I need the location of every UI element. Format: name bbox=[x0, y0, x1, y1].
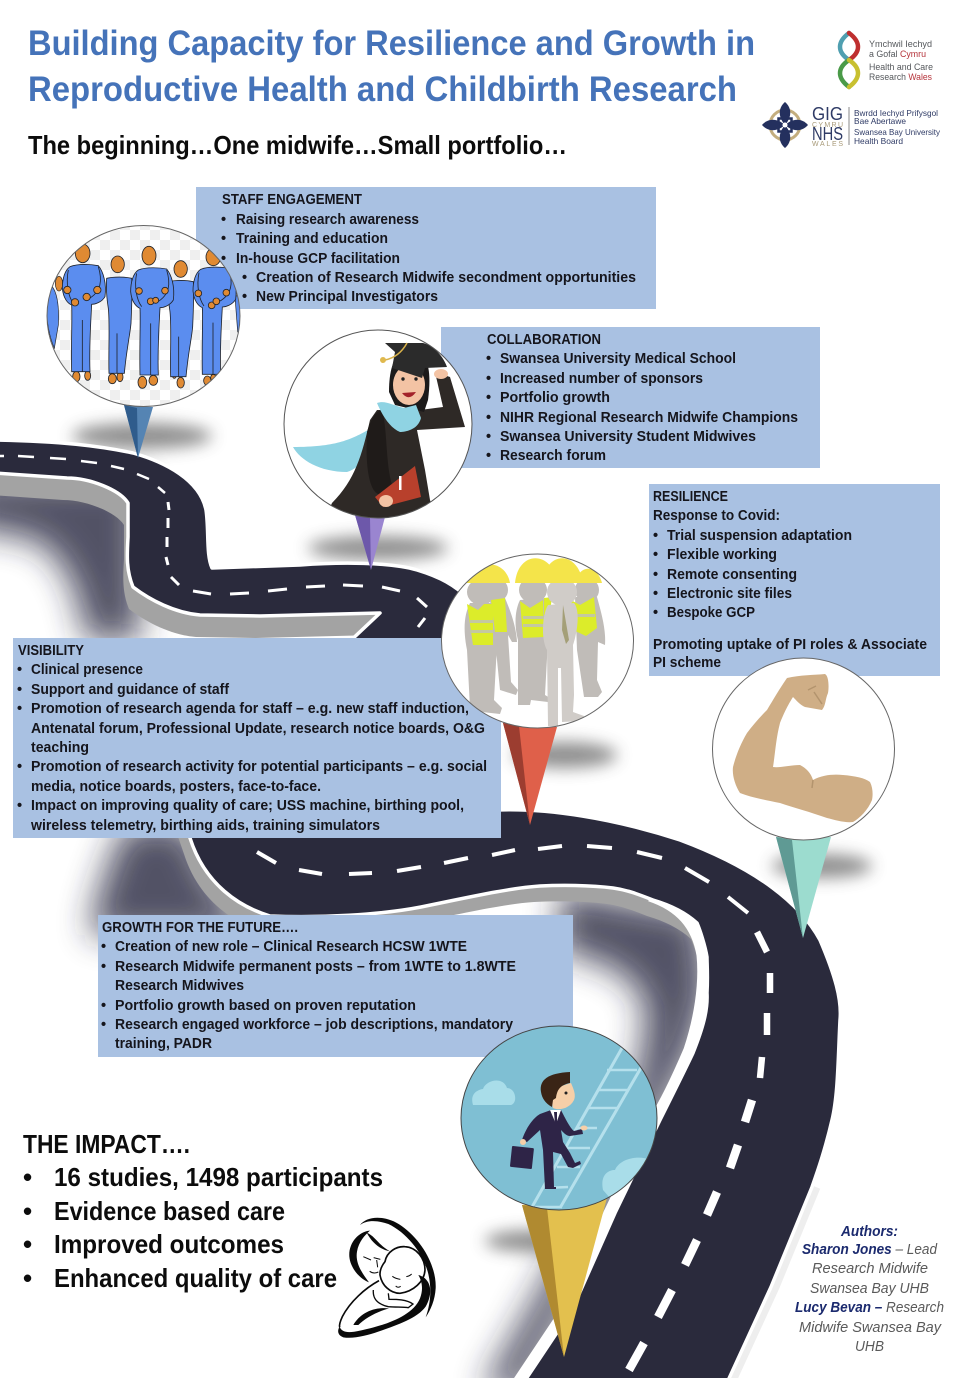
panel: visibility bbox=[13, 638, 501, 838]
hard hats bbox=[466, 558, 602, 583]
logo: NHS Wales Swansea Bay: GIG bbox=[812, 104, 843, 124]
panel: collaboration: • bbox=[486, 351, 491, 367]
panel: staff engagement: Training and education bbox=[236, 231, 388, 247]
panel: collaboration: • bbox=[486, 448, 491, 464]
panel: growth for the future: Research Midwives bbox=[115, 978, 244, 994]
panel: the impact: 16 studies, 1498 participants bbox=[54, 1162, 383, 1192]
authors credit: Midwife Swansea Bay bbox=[799, 1319, 942, 1336]
road: winding path with shadows, kerb and lane markings bbox=[0, 423, 872, 1378]
logo: NHS Wales Swansea Bay: NHS bbox=[812, 124, 843, 144]
inner kerb highlight bbox=[514, 896, 703, 1378]
panel: resilience: • bbox=[653, 528, 658, 544]
icon: helix bbox=[840, 33, 858, 87]
hands bbox=[520, 1139, 526, 1145]
icon: celtic knot bbox=[762, 102, 808, 148]
mother face bbox=[363, 1257, 380, 1273]
panel: collaboration: • bbox=[486, 390, 491, 406]
hair bbox=[389, 364, 430, 412]
heading: resilience: RESILIENCE bbox=[653, 489, 728, 505]
hand bbox=[434, 369, 448, 379]
panel: resilience: Remote consenting bbox=[667, 567, 797, 583]
panel: resilience: Flexible working bbox=[667, 547, 777, 563]
man suit bbox=[522, 1110, 583, 1189]
panel: resilience bbox=[649, 484, 940, 676]
panel: resilience: PI scheme bbox=[653, 655, 721, 671]
heading: staff engagement: STAFF ENGAGEMENT bbox=[222, 192, 362, 208]
authors credit: UHB bbox=[855, 1338, 884, 1355]
panel: collaboration: Swansea University Medical School bbox=[500, 351, 736, 367]
ladder bbox=[532, 1048, 642, 1208]
icon: graduate circle bbox=[284, 330, 472, 530]
heading: growth for the future: GROWTH FOR THE FUTURE…. bbox=[102, 920, 298, 936]
panel: collaboration bbox=[441, 327, 820, 468]
icon: staff group circle bbox=[47, 226, 242, 406]
authors credit: Authors: bbox=[840, 1223, 898, 1240]
baby head bbox=[380, 1247, 425, 1293]
logo: NHS Wales Swansea Bay: Bae Abertawe bbox=[854, 116, 906, 126]
panel: growth for the future: training, PADR bbox=[115, 1036, 213, 1052]
subtitle: The beginning…One midwife…Small portfolio… bbox=[28, 130, 567, 160]
panel: visibility: Clinical presence bbox=[31, 662, 143, 678]
scarf collar bbox=[377, 402, 421, 432]
panel: staff engagement: • bbox=[221, 212, 226, 228]
road kerb bbox=[0, 462, 834, 1378]
panel: collaboration: Portfolio growth bbox=[500, 390, 610, 406]
pin: gold bbox=[522, 1198, 607, 1357]
panel: visibility: • bbox=[17, 682, 22, 698]
panel: collaboration: • bbox=[486, 371, 491, 387]
pin: blue bbox=[124, 405, 153, 458]
panel: the impact bbox=[23, 1129, 383, 1293]
panel: resilience: Response to Covid: bbox=[653, 508, 780, 524]
logo: NHS Wales Swansea Bay: Bwrdd Iechyd Prifysgol bbox=[854, 108, 938, 118]
logo: NHS Wales Swansea Bay: WALES bbox=[812, 141, 843, 148]
authors credit: Lucy Bevan – Research bbox=[795, 1299, 944, 1316]
panel: staff engagement: • bbox=[242, 270, 247, 286]
panel: visibility: Promotion of research activity for potential participants – e.g. social bbox=[31, 759, 487, 775]
panel: growth for the future: • bbox=[101, 959, 106, 975]
authors credit: Swansea Bay UHB bbox=[810, 1280, 929, 1297]
logo: NHS Wales Swansea Bay: CYMRU bbox=[812, 122, 843, 129]
panel: resilience: Trial suspension adaptation bbox=[667, 528, 852, 544]
pin: red bbox=[503, 723, 557, 825]
lane markings upper bbox=[0, 456, 165, 493]
panel: growth for the future: Creation of new role – Clinical Research HCSW 1WTE bbox=[115, 939, 467, 955]
panel: the impact: • bbox=[23, 1263, 32, 1293]
mortarboard bbox=[385, 343, 447, 378]
heading: the impact: THE IMPACT…. bbox=[23, 1129, 190, 1159]
back figures bbox=[106, 256, 194, 388]
book bbox=[375, 466, 421, 507]
logo: NHS Wales Swansea Bay: Health Board bbox=[854, 136, 903, 146]
figure back right bbox=[575, 597, 605, 697]
road ground shadow bbox=[0, 478, 708, 1378]
panel: visibility: Antenatal forum, Professional Update, research notice boards, O&G bbox=[31, 721, 485, 737]
edge figures bbox=[47, 287, 242, 348]
panel: visibility: media, notice boards, posters, face-to-face. bbox=[31, 779, 321, 795]
icon: mother and baby bbox=[338, 1218, 436, 1338]
outer kerb lower right bbox=[730, 1187, 816, 1378]
panel: the impact: Evidence based care bbox=[54, 1196, 285, 1226]
logo: Health and Care Research Wales: Ymchwil Iechyd bbox=[869, 39, 932, 49]
panel: staff engagement: • bbox=[242, 289, 247, 305]
lane markings middle bbox=[257, 846, 748, 913]
authors credit: Sharon Jones – Lead bbox=[802, 1241, 938, 1258]
panel: visibility: Promotion of research agenda for staff – e.g. new staff induction, bbox=[31, 701, 469, 717]
icon: hard-hat team circle bbox=[442, 554, 634, 728]
mother arm and lower swoosh bbox=[338, 1275, 430, 1338]
panel: the impact: • bbox=[23, 1196, 32, 1226]
logo: Health and Care Research Wales: Research Wales bbox=[869, 72, 932, 82]
panel: resilience: • bbox=[653, 547, 658, 563]
panel: collaboration: Increased number of sponsors bbox=[500, 371, 703, 387]
panel: the impact: Enhanced quality of care bbox=[54, 1263, 337, 1293]
panel: collaboration: Research forum bbox=[500, 448, 606, 464]
panel: staff engagement: In-house GCP facilitation bbox=[236, 251, 400, 267]
panel: the impact: Improved outcomes bbox=[54, 1229, 284, 1259]
panel: visibility: • bbox=[17, 662, 22, 678]
panel: collaboration: Swansea University Student Midwives bbox=[500, 429, 756, 445]
panel: growth for the future: • bbox=[101, 1017, 106, 1033]
panel: resilience: • bbox=[653, 586, 658, 602]
panel: staff engagement: Creation of Research Midwife secondment opportunities bbox=[256, 270, 636, 286]
heading: visibility: VISIBILITY bbox=[18, 643, 84, 659]
panel: visibility: Support and guidance of staff bbox=[31, 682, 229, 698]
scarf tail bbox=[293, 430, 368, 472]
icon: flexed arm circle bbox=[712, 658, 894, 840]
panel: collaboration: NIHR Regional Research Midwife Champions bbox=[500, 410, 798, 426]
head bbox=[549, 1083, 575, 1109]
authors credit bbox=[795, 1223, 944, 1355]
panel: staff engagement: New Principal Investigators bbox=[256, 289, 438, 305]
panel: staff engagement bbox=[196, 187, 656, 309]
panel: resilience: Promoting uptake of PI roles & Associate bbox=[653, 637, 927, 653]
pin: purple bbox=[355, 515, 385, 570]
panel: collaboration: • bbox=[486, 410, 491, 426]
panel: resilience: Electronic site files bbox=[667, 586, 792, 602]
panel: the impact: • bbox=[23, 1162, 32, 1192]
title bbox=[28, 24, 755, 109]
panel: visibility: wireless telemetry, birthing aids, training simulators bbox=[30, 818, 380, 834]
figure centre back bbox=[516, 598, 550, 705]
authors credit: Research Midwife bbox=[812, 1260, 928, 1277]
panel: the impact: • bbox=[23, 1229, 32, 1259]
logo: Health and Care Research Wales: a Gofal Cymru bbox=[869, 49, 926, 59]
logo: NHS Wales Swansea Bay: Swansea Bay University bbox=[854, 127, 941, 137]
panel: visibility: Impact on improving quality of care; USS machine, birthing pool, bbox=[31, 798, 464, 814]
panel: resilience: • bbox=[653, 567, 658, 583]
front figures bbox=[62, 244, 236, 388]
logo: Health and Care Research Wales: Health and Care bbox=[869, 62, 933, 72]
icon: man climbing ladder circle bbox=[461, 1026, 660, 1210]
face bbox=[393, 370, 425, 405]
road surface bbox=[0, 440, 840, 1378]
lane markings lower bbox=[757, 932, 770, 1078]
heading: collaboration: COLLABORATION bbox=[487, 332, 601, 348]
clouds bbox=[472, 1081, 660, 1198]
baby arm bbox=[373, 1290, 413, 1308]
panel: visibility: • bbox=[17, 798, 22, 814]
pin: teal bbox=[776, 837, 831, 938]
panel: growth for the future bbox=[98, 915, 573, 1057]
gown bbox=[331, 376, 465, 518]
logo: Health and Care Research Wales bbox=[840, 33, 933, 87]
panel: staff engagement: Raising research awareness bbox=[236, 212, 419, 228]
panel: growth for the future: Research engaged workforce – job descriptions, mandatory bbox=[115, 1017, 513, 1033]
title: Reproductive Health and Childbirth Research bbox=[28, 70, 737, 109]
figure front bbox=[543, 578, 584, 726]
pin shadows bbox=[72, 423, 872, 1252]
panel: visibility: • bbox=[17, 759, 22, 775]
vests bbox=[467, 597, 597, 645]
briefcase bbox=[510, 1146, 534, 1169]
panel: staff engagement: • bbox=[221, 231, 226, 247]
figure back left bbox=[490, 598, 518, 695]
panel: resilience: • bbox=[653, 605, 658, 621]
panel: growth for the future: • bbox=[101, 998, 106, 1014]
panel: growth for the future: Portfolio growth based on proven reputation bbox=[115, 998, 416, 1014]
panel: visibility: • bbox=[17, 701, 22, 717]
mother hair bbox=[349, 1231, 370, 1282]
panel: growth for the future: Research Midwife permanent posts – from 1WTE to 1.8WTE bbox=[115, 959, 516, 975]
panel: staff engagement: • bbox=[221, 251, 226, 267]
panel: collaboration: • bbox=[486, 429, 491, 445]
panel: resilience: Bespoke GCP bbox=[667, 605, 755, 621]
logo: NHS Wales Swansea Bay bbox=[762, 102, 941, 148]
title: Building Capacity for Resilience and Growth in bbox=[28, 24, 755, 63]
panel: growth for the future: • bbox=[101, 939, 106, 955]
outer swoosh bbox=[360, 1218, 436, 1317]
panel: visibility: teaching bbox=[31, 740, 89, 756]
figure left bbox=[465, 603, 502, 714]
